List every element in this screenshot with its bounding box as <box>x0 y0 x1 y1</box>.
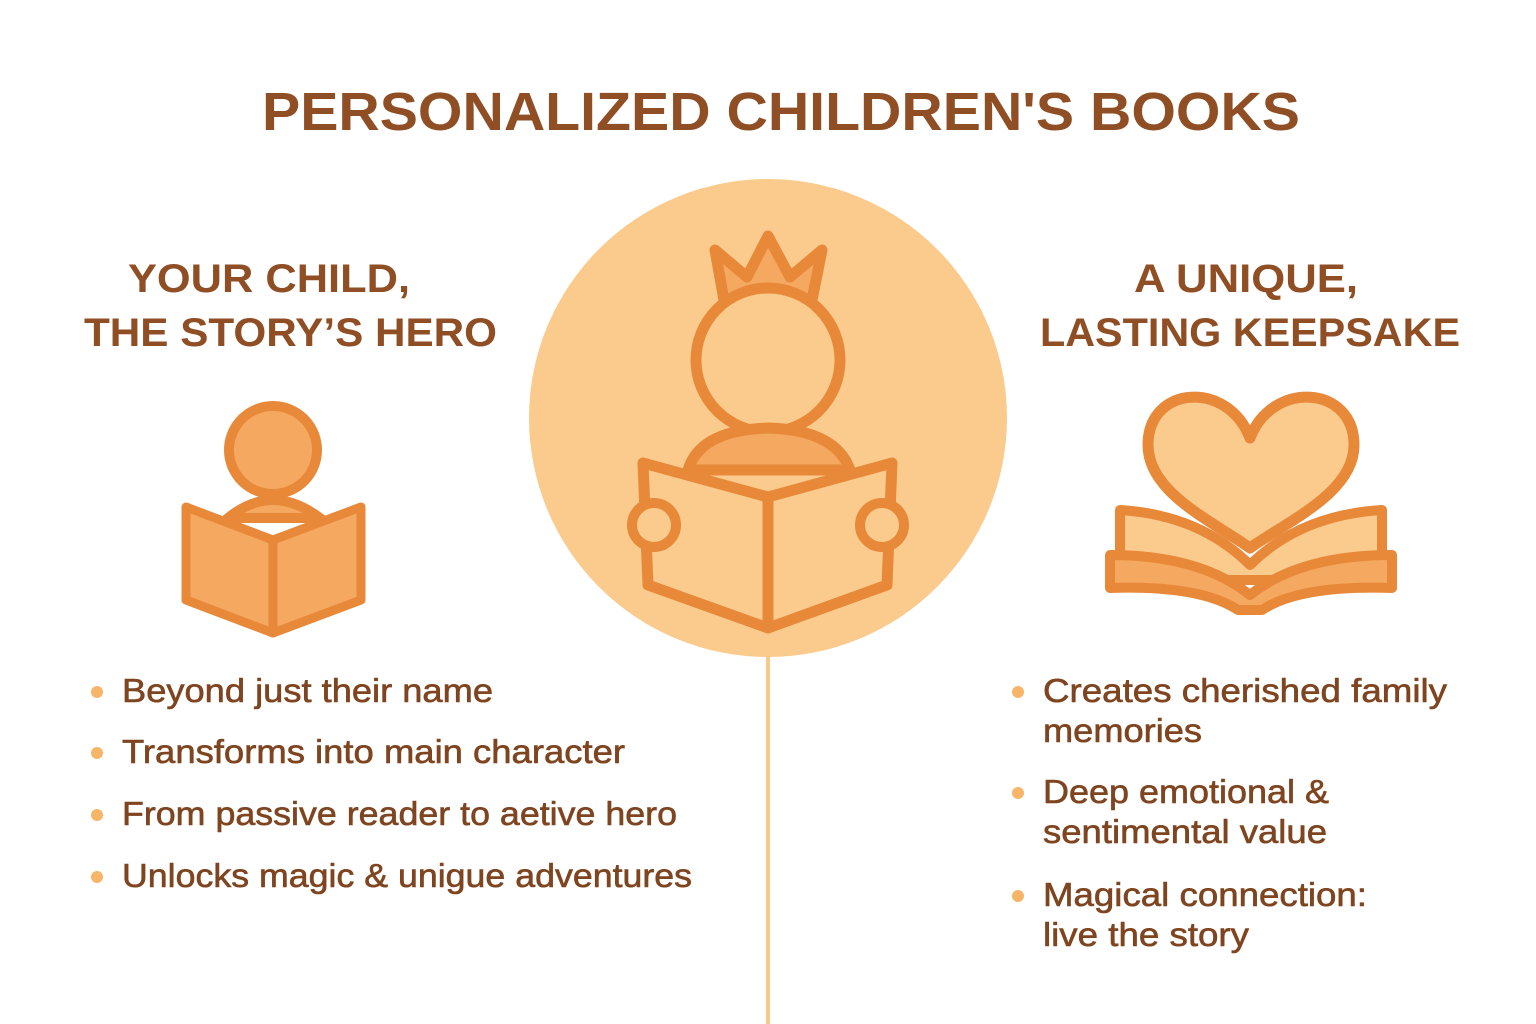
icon: head <box>696 288 840 432</box>
left bullet list: Beyond just their name <box>122 672 493 709</box>
icon: child reading <box>186 406 361 633</box>
left heading: THE STORY’S HERO <box>84 311 497 355</box>
left heading: YOUR CHILD, <box>128 257 410 301</box>
right bullet list <box>1012 672 1448 953</box>
left bullet list: From passive reader to aetive hero <box>122 795 677 832</box>
icon: hands <box>632 503 676 547</box>
left bullet list <box>91 672 692 894</box>
right bullet list: Deep emotional & <box>1043 773 1329 810</box>
left bullet list: Unlocks magic & unigue adventures <box>122 857 692 894</box>
title: PERSONALIZED CHILDREN'S BOOKS <box>262 82 1300 142</box>
right bullet list: Magical connection: <box>1043 876 1367 913</box>
icon: heart book <box>1110 397 1392 610</box>
right heading: LASTING KEEPSAKE <box>1040 311 1460 355</box>
center divider line <box>766 640 770 1024</box>
icon: open book <box>643 463 892 628</box>
right bullet list: Creates cherished family <box>1043 672 1448 709</box>
right bullet list: live the story <box>1043 916 1250 953</box>
icon: body <box>688 428 850 470</box>
icon: crown <box>715 236 822 300</box>
right bullet list: memories <box>1043 712 1202 749</box>
center circle with crowned reader icon <box>529 179 1007 657</box>
left bullet list: Transforms into main character <box>122 733 625 770</box>
right bullet list: sentimental value <box>1043 813 1327 850</box>
right heading: A UNIQUE, <box>1134 257 1358 301</box>
